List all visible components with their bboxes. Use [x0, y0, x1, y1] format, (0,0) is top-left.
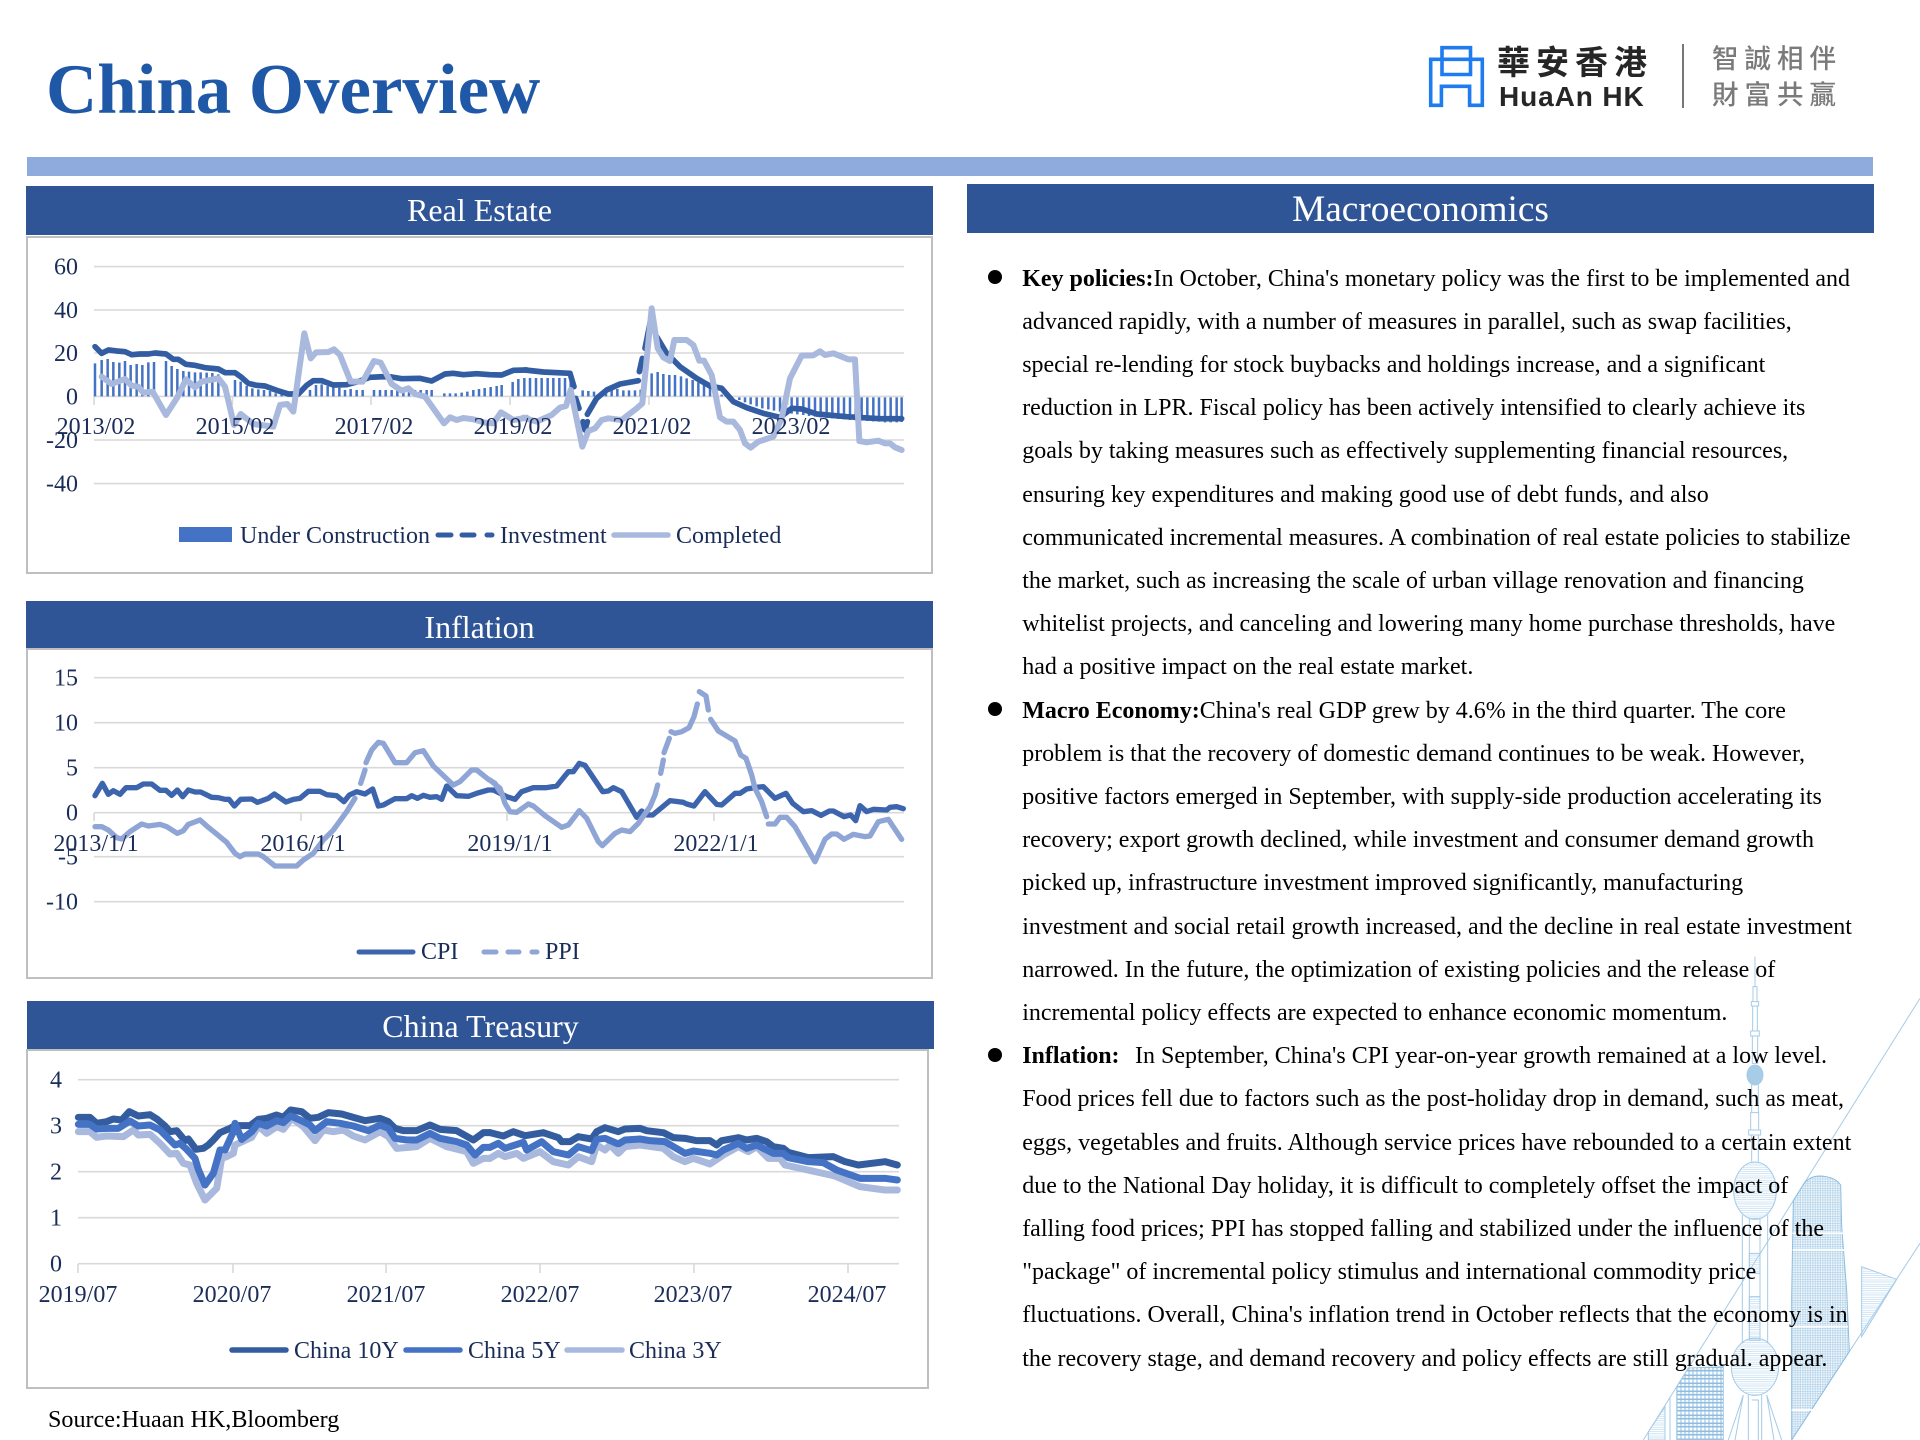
y axis labels: 10 [54, 711, 78, 737]
x axis labels: 2021/07 [347, 1282, 425, 1308]
y axis labels: 3 [50, 1114, 62, 1140]
text block: macro economy: problem is that the recovery of domestic demand continues to be weak. However, [1022, 741, 1805, 767]
text block: key policies: the market, such as increasing the scale of urban village renovation and financing [1022, 568, 1804, 594]
y axis labels: -5 [58, 845, 78, 871]
y axis labels: 5 [66, 756, 78, 782]
legend: PPI [545, 939, 580, 965]
logo slogan [1712, 44, 1842, 110]
y axis labels: -10 [46, 890, 78, 916]
text block: inflation: due to the National Day holiday, it is difficult to completely offset the impact of [1022, 1173, 1788, 1199]
text block: key policies: special re-lending for stock buybacks and holdings increase, and a significant [1022, 352, 1765, 378]
text block: inflation: fluctuations. Overall, China's inflation trend in October reflects that the economy is in [1022, 1302, 1848, 1328]
legend: China 10Y [294, 1338, 399, 1364]
y axis labels: 60 [54, 255, 78, 281]
bullet: inflation [988, 1048, 1002, 1062]
legend: Under Construction [240, 523, 430, 549]
series: China 5Y line [78, 1116, 897, 1185]
text block: key policies: ensuring key expenditures and making good use of debt funds, and also [1022, 482, 1709, 508]
text block: macro economy: investment and social retail growth increased, and the decline in real estate investment [1022, 914, 1852, 940]
series: investment line [95, 323, 902, 430]
logo divider [1682, 44, 1684, 108]
icon: HuaAn logo mark [1428, 46, 1484, 108]
text block: key policies: advanced rapidly, with a number of measures in parallel, such as swap facilities, [1022, 309, 1792, 335]
y axis labels: 0 [66, 801, 78, 827]
series: China 3Y line [78, 1118, 897, 1200]
text block: macro economy: picked up, infrastructure investment improved significantly, manufacturing [1022, 870, 1743, 896]
x axis labels [57, 414, 830, 440]
title: China Overview [46, 50, 540, 128]
series: China 10Y line [78, 1110, 897, 1165]
series: under construction bars [95, 359, 902, 422]
text block: key policies: goals by taking measures such as effectively supplementing financial resources, [1022, 438, 1788, 464]
legend: CPI [421, 939, 458, 965]
text block: macro economy: recovery; export growth declined, while investment and consumer demand growth [1022, 827, 1814, 853]
y axis labels: 0 [66, 384, 78, 410]
x axis labels [39, 1282, 886, 1308]
text block: key policies: whitelist projects, and canceling and lowering many home purchase thresholds, have [1022, 611, 1835, 637]
logo slogan: 智誠相伴 [1712, 44, 1842, 74]
logo name Chinese: 華安香港 [1497, 44, 1653, 81]
y axis labels: -20 [46, 428, 78, 454]
text block: inflation: the recovery stage, and demand recovery and policy effects are still gradual. appear. [1022, 1346, 1827, 1372]
legend [359, 939, 580, 965]
chart: inflation [26, 648, 933, 979]
text block: inflation: "package" of incremental policy stimulus and international commodity price [1022, 1259, 1756, 1285]
top banner bar [27, 157, 1873, 176]
x axis labels [53, 831, 759, 857]
panel: china treasury [26, 1001, 934, 1389]
legend: China 5Y [468, 1338, 561, 1364]
heading: Macroeconomics [967, 184, 1874, 233]
x axis labels: 2016/1/1 [260, 831, 346, 857]
text block: key policies [1022, 266, 1851, 680]
logo: HuaAn HK [1428, 44, 1842, 112]
legend [179, 523, 781, 549]
text block: inflation: Food prices fell due to factors such as the post-holiday drop in demand, such as meat, [1022, 1086, 1844, 1112]
y axis labels: 20 [54, 341, 78, 367]
heading: Inflation [26, 601, 933, 648]
text block: inflation [1022, 1043, 1852, 1372]
y axis labels: 1 [50, 1206, 62, 1232]
heading: Real Estate: Real Estate [407, 192, 552, 228]
x axis labels: 2019/07 [39, 1282, 117, 1308]
y axis labels: -40 [46, 472, 78, 498]
y axis labels: 2 [50, 1160, 62, 1186]
y axis labels [46, 666, 78, 916]
x axis labels: 2013/1/1 [53, 831, 139, 857]
chart: china treasury [26, 1049, 929, 1389]
y axis labels [46, 255, 78, 498]
x axis labels: 2017/02 [335, 414, 413, 440]
x axis labels: 2013/02 [57, 414, 135, 440]
x axis labels: 2021/02 [613, 414, 691, 440]
logo slogan: 財富共贏 [1712, 80, 1842, 110]
x axis labels: 2023/02 [752, 414, 830, 440]
text block: macro economy: incremental policy effects are expected to enhance economic momentum. [1022, 1000, 1727, 1026]
legend: Investment [500, 523, 607, 549]
text block: key policies: Key policies:In October, China's monetary policy was the first to be implemented and [1022, 266, 1850, 292]
text block: macro economy: narrowed. In the future, the optimization of existing policies and the release of [1022, 957, 1775, 983]
legend [232, 1338, 722, 1364]
text block: key policies: communicated incremental measures. A combination of real estate policies to stabilize [1022, 525, 1851, 551]
x axis labels: 2022/1/1 [673, 831, 759, 857]
y axis labels [50, 1068, 62, 1278]
heading: Inflation: Inflation [424, 609, 535, 645]
series: CPI line [95, 763, 903, 821]
text block: key policies: had a positive impact on the real estate market. [1022, 654, 1473, 680]
x axis labels: 2020/07 [193, 1282, 271, 1308]
panel: inflation [26, 601, 933, 979]
heading: Macroeconomics: Macroeconomics [1292, 189, 1549, 230]
text block: inflation: falling food prices; PPI has stopped falling and stabilized under the influence of the [1022, 1216, 1824, 1242]
legend: China 3Y [629, 1338, 722, 1364]
heading: Real Estate [26, 186, 933, 235]
text block: inflation: eggs, vegetables and fruits. Although service prices have rebounded to a certain extent [1022, 1130, 1851, 1156]
panel: real estate [26, 186, 933, 574]
x axis labels: 2019/1/1 [467, 831, 553, 857]
y axis labels: 40 [54, 298, 78, 324]
text block: macro economy: positive factors emerged in September, with supply-side production accelerating its [1022, 784, 1822, 810]
y axis labels: 4 [50, 1068, 62, 1094]
chart: real estate [26, 236, 933, 574]
x axis labels: 2024/07 [808, 1282, 886, 1308]
y axis labels: 0 [50, 1252, 62, 1278]
series: PPI line [95, 692, 902, 866]
text block: macro economy [1022, 698, 1852, 1026]
y axis labels: 15 [54, 666, 78, 692]
heading: China Treasury [27, 1001, 934, 1049]
legend: Completed [676, 523, 781, 549]
x axis labels: 2019/02 [474, 414, 552, 440]
source note: Source:Huaan HK,Bloomberg [48, 1406, 339, 1432]
series: completed line [102, 308, 902, 450]
heading: China Treasury: China Treasury [382, 1008, 579, 1044]
x axis labels: 2023/07 [654, 1282, 732, 1308]
x axis labels: 2022/07 [501, 1282, 579, 1308]
text block: macro economy: Macro Economy:China's real GDP grew by 4.6% in the third quarter. The core [1022, 698, 1786, 724]
logo name English: HuaAn HK [1499, 81, 1645, 112]
text block: inflation: Inflation: In September, China's CPI year-on-year growth remained at a low level. [1022, 1043, 1827, 1069]
text block: key policies: reduction in LPR. Fiscal policy has been actively intensified to clearly achieve its [1022, 395, 1805, 421]
decorative skyline illustration [1643, 956, 1920, 1440]
bullet: key policies [988, 270, 1002, 284]
bullet: macro economy [988, 702, 1002, 716]
x axis labels: 2015/02 [196, 414, 274, 440]
